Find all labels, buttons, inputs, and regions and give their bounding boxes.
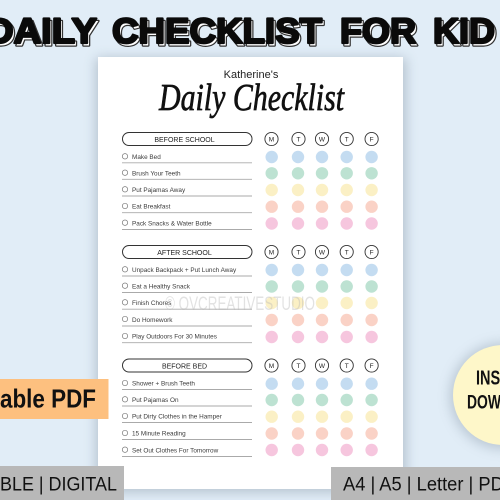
task list: Brush Your Teeth — [132, 170, 181, 178]
weekday badges: W — [319, 249, 326, 256]
section header pill — [122, 246, 252, 258]
task list: Put Pajamas On — [132, 397, 179, 404]
task list: Set Out Clothes For Tomorrow — [132, 447, 219, 454]
title: daily checklist for kids: FOR — [340, 12, 416, 51]
weekday badges: T — [345, 136, 349, 143]
weekday badges: F — [370, 363, 374, 370]
section header pill: AFTER SCHOOL — [157, 250, 212, 257]
title: daily checklist for kids: FOR — [342, 14, 418, 54]
weekday badges: M — [269, 363, 274, 370]
weekday badges: M — [269, 136, 274, 143]
weekday badges: T — [297, 249, 301, 256]
banner: printable digital — [0, 466, 124, 500]
section: after school — [122, 245, 378, 343]
task list: Do Homework — [132, 317, 173, 324]
title: daily checklist for kids — [0, 12, 500, 54]
task list: Play Outdoors For 30 Minutes — [132, 334, 217, 341]
weekday badges — [265, 359, 378, 372]
title: daily checklist for kids: CHECKLIST — [114, 14, 324, 54]
weekday badges — [265, 132, 378, 146]
task list — [122, 380, 252, 456]
colour dots grid — [266, 264, 378, 343]
task list: Pack Snacks & Water Bottle — [132, 220, 212, 228]
task list: 15 Minute Reading — [132, 430, 186, 438]
panel: checklist paper — [98, 57, 403, 489]
weekday badges: W — [319, 363, 326, 370]
task list: Make Bed — [132, 154, 161, 161]
weekday badges: T — [297, 136, 301, 143]
watermark: © OVCREATIVESTUDIO — [165, 294, 315, 315]
task list — [122, 154, 252, 230]
weekday badges: F — [370, 136, 374, 143]
colour dots grid — [266, 151, 378, 230]
weekday badges: W — [319, 136, 326, 143]
task list: Eat Breakfast — [132, 204, 171, 211]
task list: Unpack Backpack + Put Lunch Away — [132, 267, 237, 274]
section header pill — [122, 359, 252, 372]
section header pill: BEFORE BED — [162, 364, 207, 370]
weekday badges: F — [370, 249, 374, 256]
paper shadow — [96, 58, 406, 492]
task list: Shower + Brush Teeth — [132, 381, 195, 388]
weekday badges — [265, 245, 378, 259]
colour dots grid — [266, 378, 378, 456]
heading: Katherine's: Katherine's — [224, 69, 279, 81]
section header pill: BEFORE SCHOOL — [154, 137, 215, 144]
section header pill — [122, 132, 252, 146]
weekday badges: T — [345, 249, 349, 256]
banner: printable digital: BLE | DIGITAL — [0, 474, 117, 496]
banner: editable PDF: able PDF — [0, 384, 96, 414]
task list: Put Dirty Clothes in the Hamper — [132, 414, 223, 421]
title: daily checklist for kids: KID — [433, 12, 495, 51]
section: before bed — [122, 359, 378, 456]
task list: Finish Chores — [132, 300, 171, 307]
banner: paper sizes — [331, 467, 500, 500]
weekday badges: T — [297, 363, 301, 370]
heading: Daily Checklist: Daily Checklist — [158, 77, 345, 119]
task list: Put Pajamas Away — [132, 187, 186, 194]
title: daily checklist for kids: KID — [435, 14, 497, 54]
badge: instant download — [453, 345, 500, 445]
title: daily checklist for kids: CHECKLIST — [112, 12, 322, 51]
task list — [122, 267, 252, 343]
weekday badges: T — [345, 363, 349, 370]
task list: Eat a Healthy Snack — [132, 284, 191, 290]
weekday badges: M — [269, 249, 274, 256]
shadow of instant download badge — [450, 343, 500, 449]
section: before school — [122, 132, 378, 230]
